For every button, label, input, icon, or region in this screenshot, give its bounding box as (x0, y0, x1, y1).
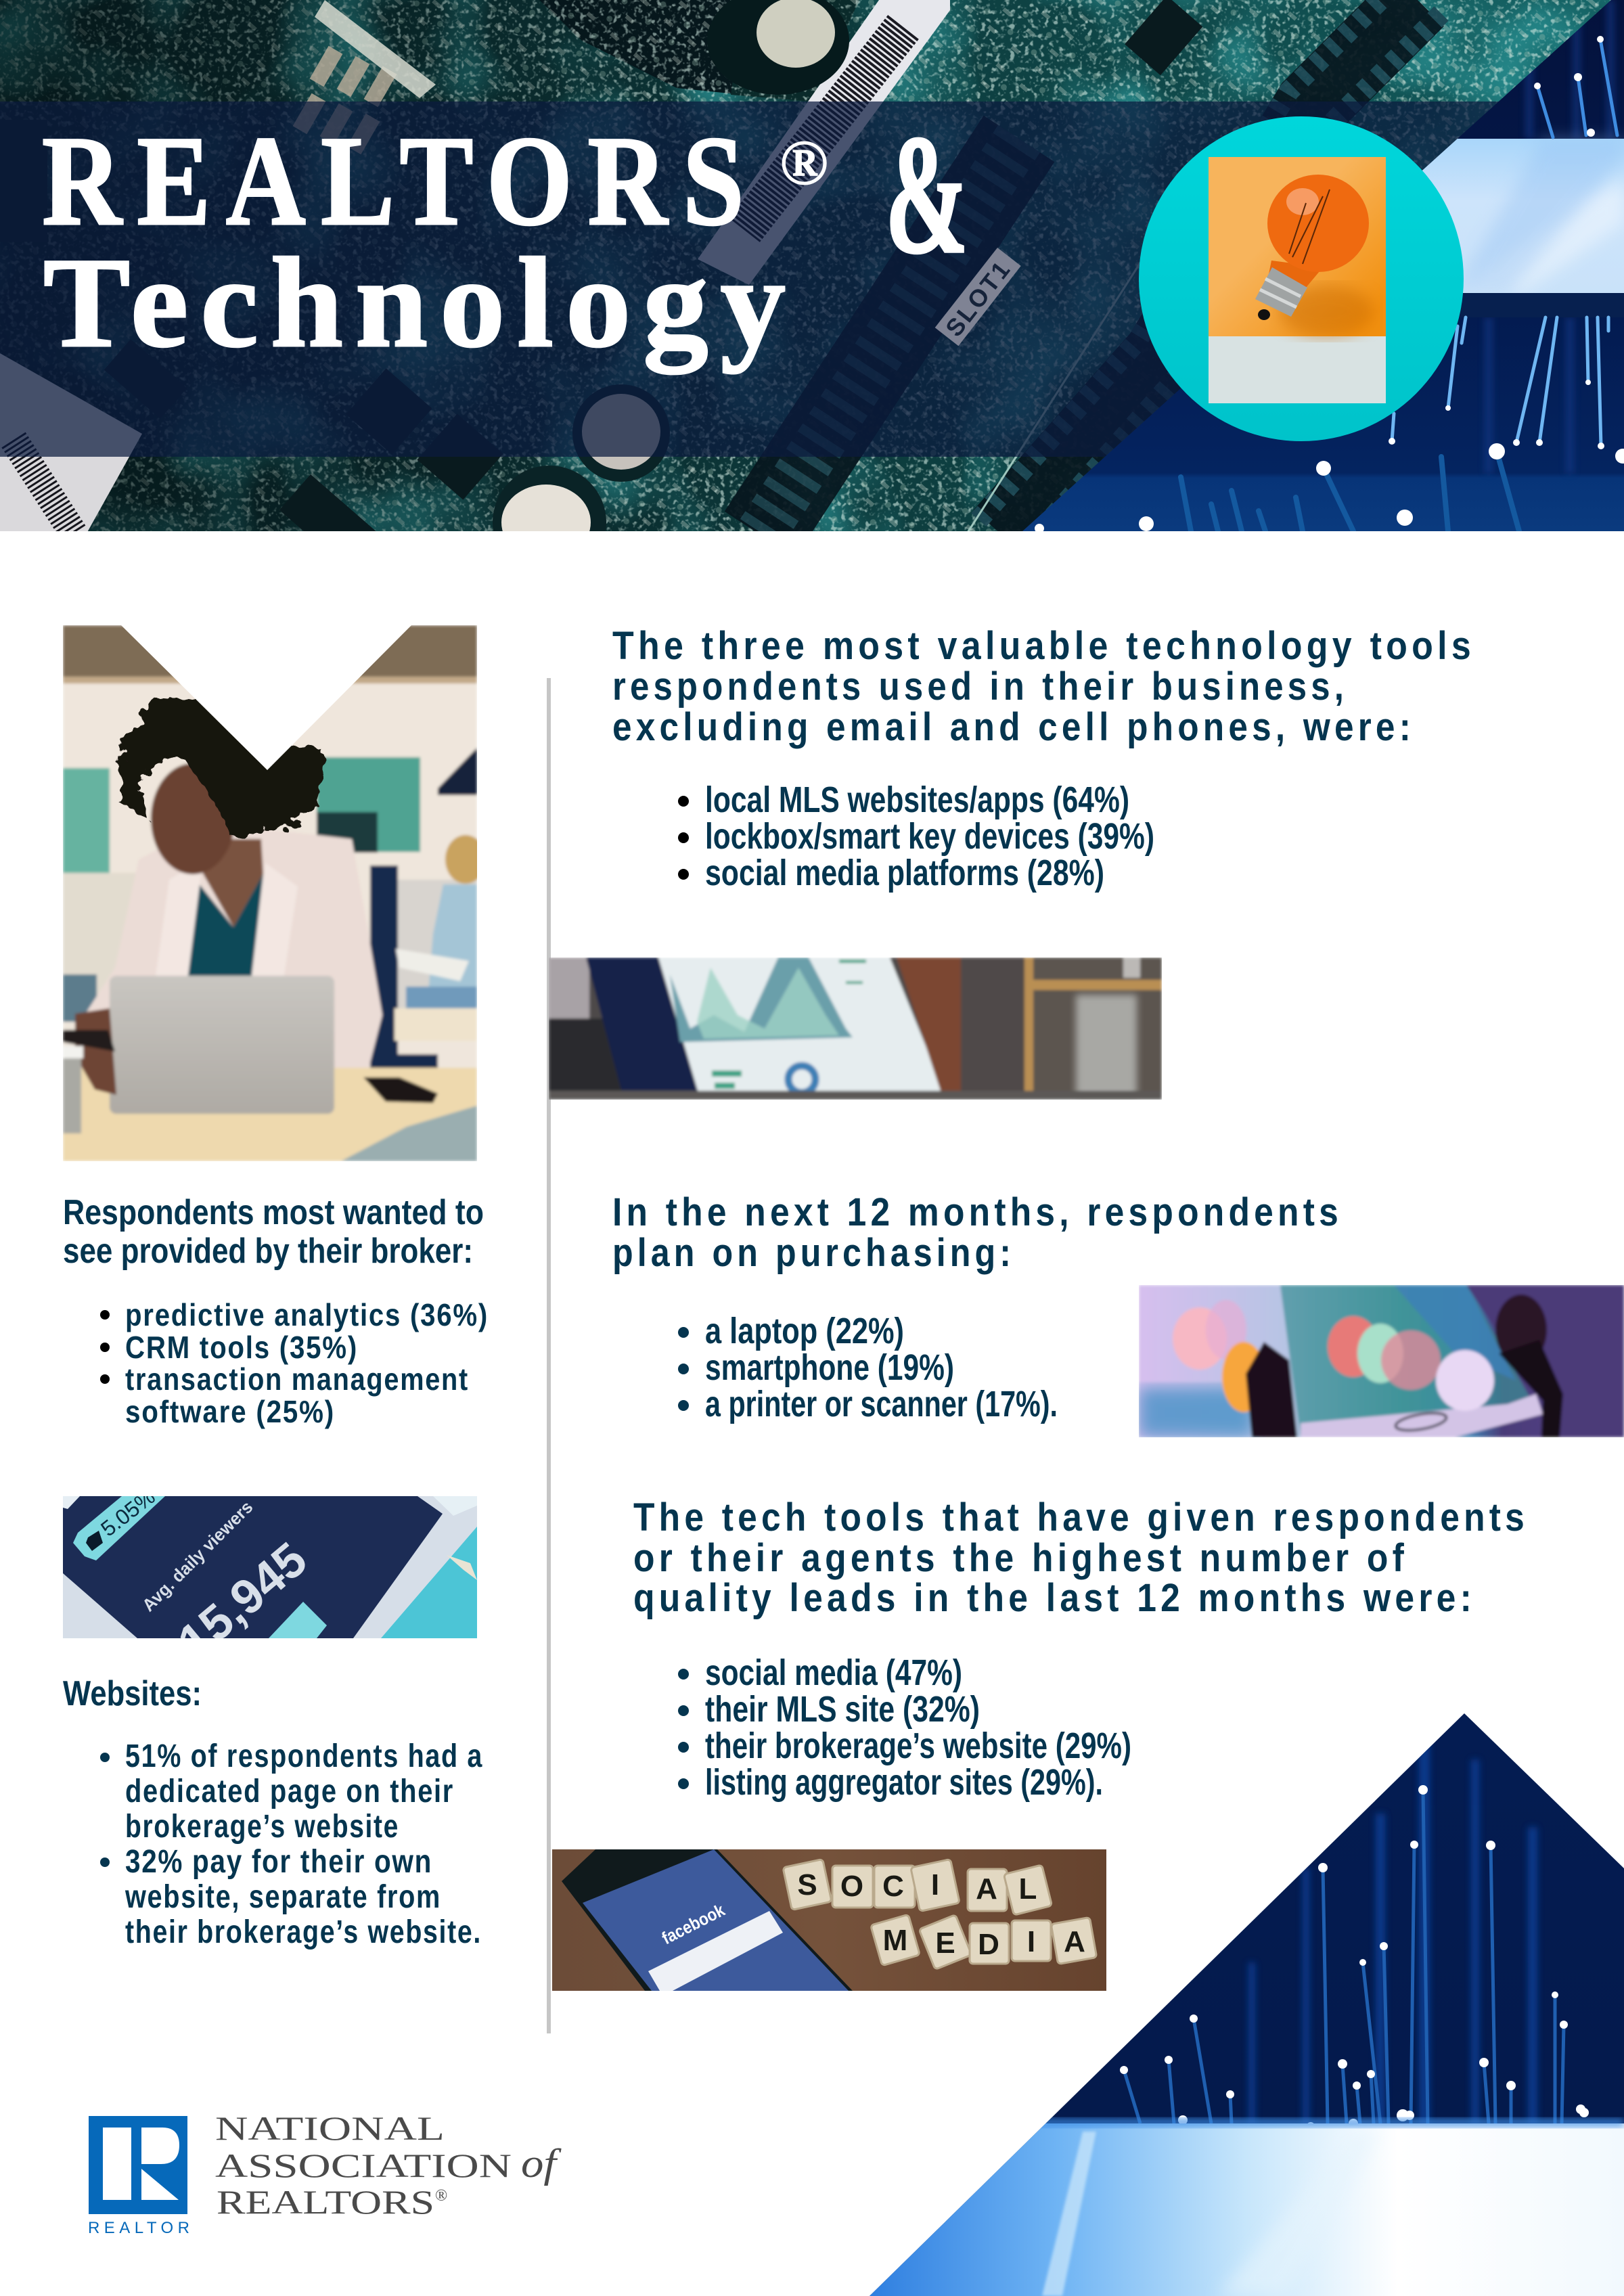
photo: social media scrabble tiles and phone: D (978, 1928, 999, 1961)
title: REALTORS® & Technology (42, 100, 968, 374)
list: websites (100, 1738, 483, 1950)
heading: three most valuable tools: The three most valuable technology tools (612, 624, 1475, 668)
photo: analytics tablet: 5.05% (96, 1484, 160, 1541)
list: websites: 32% pay for their own (125, 1844, 432, 1880)
heading: three most valuable tools: respondents used in their business, (612, 665, 1348, 708)
photo: social media scrabble tiles and phone: S (797, 1868, 817, 1901)
translucent title band (0, 102, 1624, 457)
photo: social media scrabble tiles and phone: facebook (658, 1899, 728, 1948)
list: lead sources (678, 1652, 1131, 1803)
heading: broker wishes: see provided by their broker: (63, 1232, 473, 1271)
heading: broker wishes (63, 1193, 484, 1271)
heading: Websites: Websites: (63, 1674, 202, 1713)
logo text: National Association of Realtors: of (521, 2141, 562, 2186)
icon: light bulb on card in teal circle (1139, 116, 1464, 441)
list: broker tools: CRM tools (35%) (125, 1330, 358, 1365)
photo: social media scrabble tiles and phone: C (882, 1870, 904, 1903)
list: broker tools: software (25%) (125, 1394, 335, 1429)
list: websites: website, separate from (125, 1879, 441, 1915)
header banner (0, 0, 1624, 579)
list: lead sources: their MLS site (32%) (705, 1689, 980, 1730)
logo text: National Association of Realtors: NATIONAL (215, 2109, 445, 2147)
list: valuable tools: social media platforms (28%) (705, 853, 1104, 893)
list: websites: dedicated page on their (125, 1774, 454, 1809)
heading: next 12 months (612, 1190, 1343, 1275)
text: SLOT1 board label: SLOT1 (940, 254, 1016, 342)
circuit board photo (0, 0, 1624, 579)
title: REALTORS® & Technology: Technology (43, 232, 798, 374)
list: broker tools: transaction management (125, 1361, 469, 1397)
photo: social media scrabble tiles and phone (552, 1849, 1106, 1991)
list: broker tools: predictive analytics (36%) (125, 1297, 489, 1332)
list: purchases: smartphone (19%) (705, 1347, 954, 1388)
list: lead sources: listing aggregator sites (29%). (705, 1762, 1103, 1803)
heading: three most valuable tools (612, 624, 1475, 749)
list: lead sources: their brokerage’s website (29%) (705, 1726, 1131, 1766)
heading: tech tools leads (633, 1495, 1529, 1620)
heading: next 12 months: plan on purchasing: (612, 1231, 1015, 1275)
photo: analytics tablet: Avg. daily viewers (138, 1497, 256, 1615)
list: purchases: a laptop (22%) (705, 1311, 904, 1351)
photo: laptop dashboard (549, 958, 1162, 1100)
list: websites: their brokerage’s website. (125, 1914, 482, 1950)
logo: REALTOR block R: REALTOR (88, 2219, 189, 2237)
logo text: National Association of Realtors: ASSOCIATION (215, 2146, 512, 2184)
photo: social media scrabble tiles and phone: A (976, 1872, 997, 1906)
list: valuable tools: local MLS websites/apps (64%) (705, 780, 1129, 820)
heading: three most valuable tools: excluding email and cell phones, were: (612, 705, 1415, 749)
photo: social media scrabble tiles and phone: L (1019, 1872, 1037, 1906)
heading: next 12 months: In the next 12 months, respondents (612, 1190, 1343, 1234)
photo: woman at laptop (63, 625, 486, 1161)
photo: social media scrabble tiles and phone: A (1064, 1925, 1085, 1958)
logo text: National Association of Realtors (215, 2109, 562, 2221)
list: websites: 51% of respondents had a (125, 1738, 483, 1774)
title: REALTORS® & Technology: REALTORS (42, 110, 759, 252)
list: lead sources: social media (47%) (705, 1652, 962, 1693)
title: REALTORS® & Technology: ® (780, 128, 828, 198)
photo: social media scrabble tiles and phone: O (840, 1870, 863, 1903)
logo text: National Association of Realtors: REALTORS (217, 2183, 434, 2221)
heading: broker wishes: Respondents most wanted to (63, 1193, 484, 1232)
list: valuable tools (678, 780, 1154, 893)
heading: tech tools leads: quality leads in the last 12 months were: (633, 1576, 1476, 1620)
photo: analytics tablet (63, 1496, 477, 1638)
divider line (547, 678, 551, 2033)
list: valuable tools: lockbox/smart key devices (39%) (705, 816, 1154, 857)
photo: smartphone with bokeh (1139, 1285, 1624, 1437)
photo: social media scrabble tiles and phone: I (931, 1868, 939, 1901)
list: broker tools (100, 1297, 489, 1429)
title: REALTORS® & Technology: & (885, 100, 968, 289)
heading: tech tools leads: The tech tools that have given respondents (633, 1495, 1529, 1539)
photo: social media scrabble tiles and phone: E (935, 1927, 955, 1960)
photo: social media scrabble tiles and phone: I (1027, 1925, 1035, 1958)
list: purchases: a printer or scanner (17%). (705, 1384, 1058, 1424)
list: purchases (678, 1311, 1058, 1424)
list: websites: brokerage’s website (125, 1809, 399, 1845)
fiber optic triangle (870, 1713, 1624, 2296)
photo: analytics tablet: 115,945 (150, 1532, 317, 1685)
fiber optic photo (1015, 0, 1624, 533)
logo text: National Association of Realtors: ® (435, 2187, 447, 2205)
logo: REALTOR block R (88, 2116, 189, 2237)
heading: tech tools leads: or their agents the highest number of (633, 1536, 1408, 1580)
photo: social media scrabble tiles and phone: M (883, 1924, 907, 1957)
